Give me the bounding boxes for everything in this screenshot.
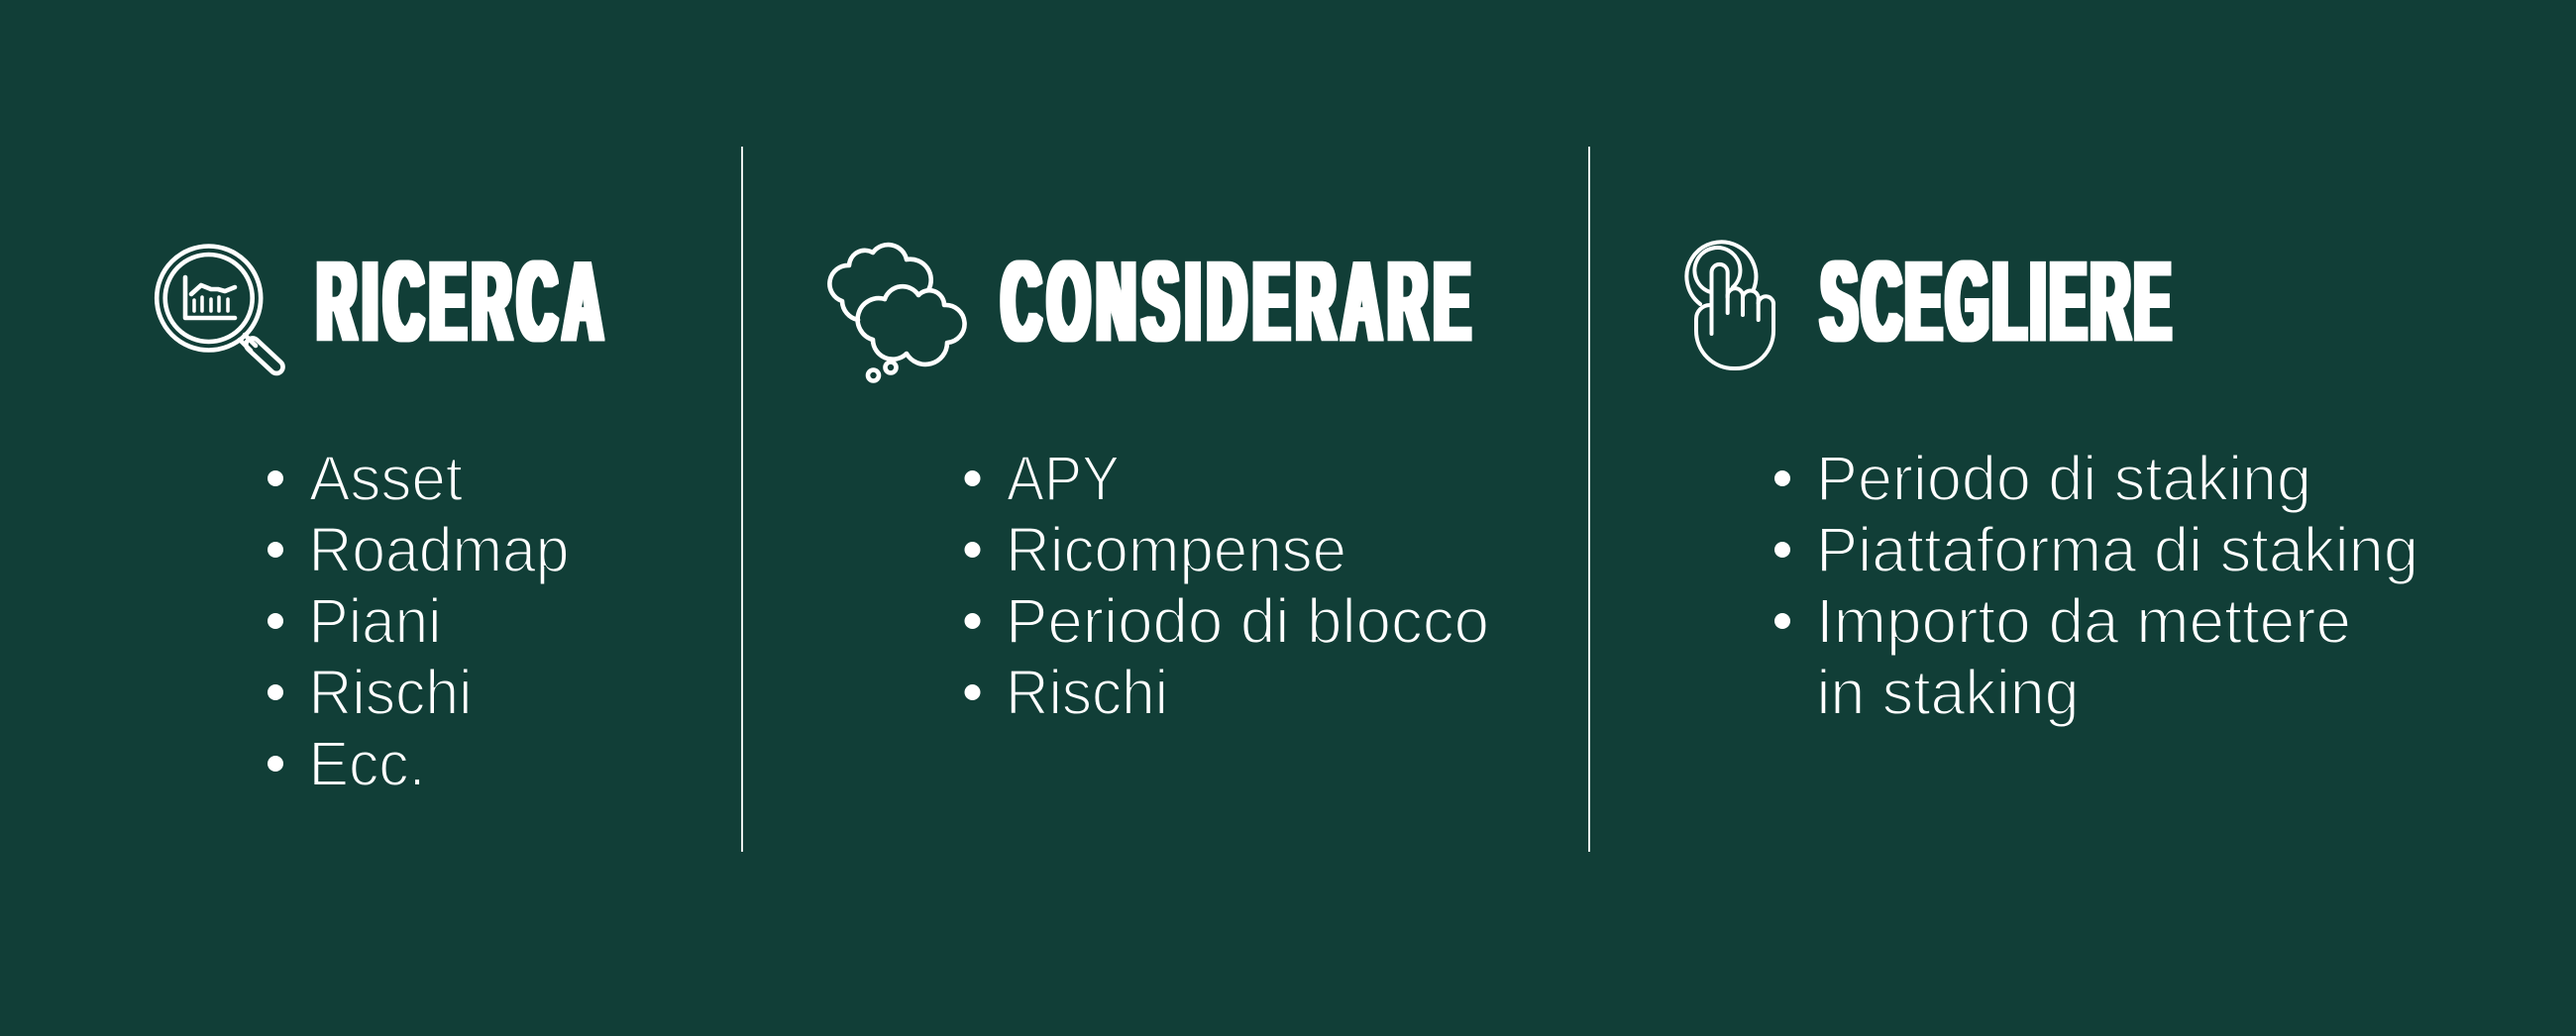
list: ricerca: Rischi <box>309 657 472 728</box>
list: scegliere: in staking <box>1817 657 2079 728</box>
list: considerare <box>965 443 1489 728</box>
list: considerare: Rischi <box>1006 657 1168 728</box>
panel: considerare <box>829 238 1489 728</box>
list: scegliere: Piattaforma di staking <box>1816 514 2418 585</box>
icon: magnifying glass with chart <box>157 246 285 376</box>
list: scegliere <box>1774 443 2418 728</box>
heading: ricerca: RICERCA <box>317 238 602 364</box>
list: ricerca: Ecc. <box>309 728 426 799</box>
list: considerare: Periodo di blocco <box>1006 585 1489 657</box>
panel: ricerca <box>157 238 602 799</box>
list: ricerca: Asset <box>309 443 463 514</box>
list: scegliere: Periodo di staking <box>1816 443 2311 514</box>
icon: thought clouds <box>829 245 965 380</box>
icon: hand tapping <box>1686 242 1773 368</box>
list: considerare: Ricompense <box>1006 514 1346 585</box>
panel: scegliere <box>1686 238 2418 728</box>
heading: considerare: CONSIDERARE <box>1002 238 1470 364</box>
list: ricerca: Piani <box>309 585 442 657</box>
list: considerare: APY <box>1007 443 1120 514</box>
list: ricerca <box>268 443 569 799</box>
heading: scegliere: SCEGLIERE <box>1821 238 2171 364</box>
list: ricerca: Roadmap <box>309 514 569 585</box>
list: scegliere: Importo da mettere <box>1816 585 2351 657</box>
